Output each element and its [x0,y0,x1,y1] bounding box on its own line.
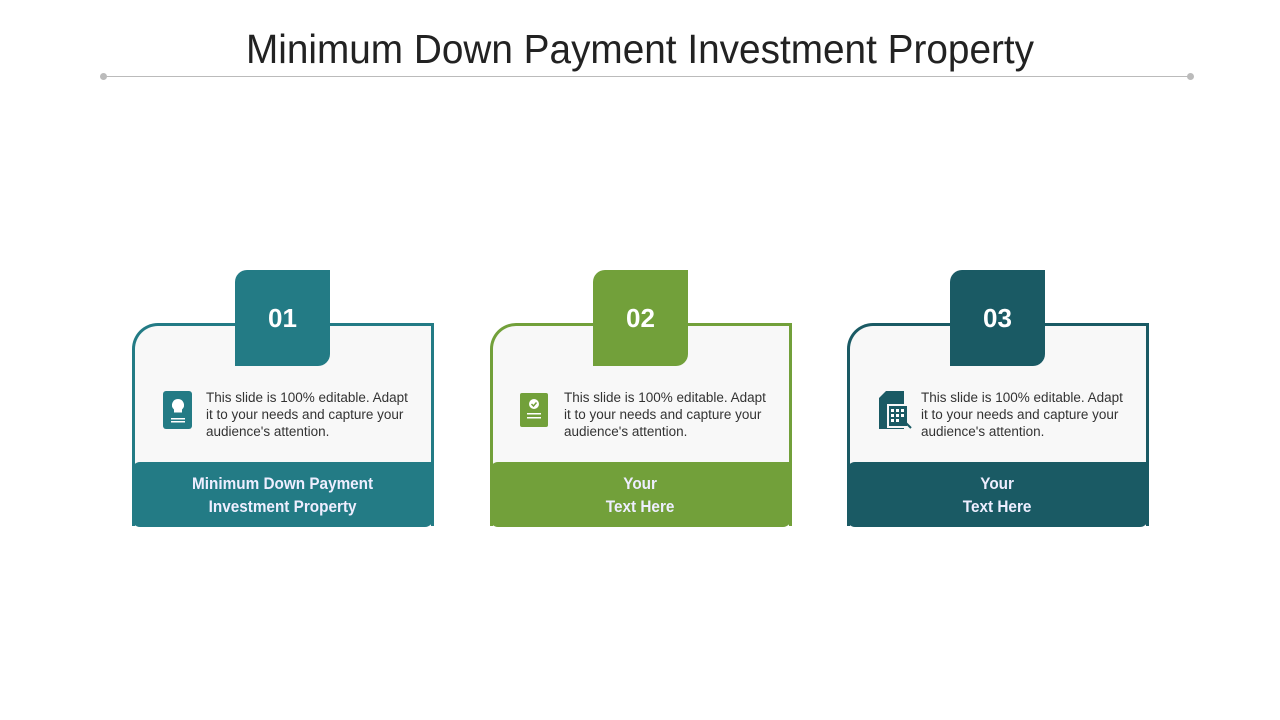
icon: calculator document [879,391,912,429]
text block: it to your needs and capture your audience's attention. [206,407,403,439]
number tab 02 [593,270,688,366]
label bar: Minimum Down Payment [192,474,373,492]
number tab 03: 03 [983,302,1012,332]
label bar: Your [981,474,1014,492]
title: Minimum Down Payment Investment Property [246,26,1034,72]
label bar [847,462,1148,527]
number tab 02: 02 [626,302,655,332]
text block: This slide is 100% editable. Adapt [206,390,408,405]
text block: This slide is 100% editable. Adapt [921,390,1123,405]
label bar [132,462,433,527]
text block [564,390,766,439]
label bar: Text Here [606,496,675,516]
panel: 01 [132,270,434,527]
text block: This slide is 100% editable. Adapt [564,390,766,405]
label bar: Your [624,474,657,492]
number tab 01: 01 [268,302,297,332]
text block: it to your needs and capture your audience's attention. [921,407,1118,439]
icon: lightbulb [163,391,192,429]
text block: it to your needs and capture your audience's attention. [564,407,761,439]
panel: 02 [490,270,792,527]
number tab 01 [235,270,330,366]
label bar: Text Here [963,496,1032,516]
label bar [490,462,791,527]
icon: document check [520,393,548,427]
panel: 03 [847,270,1149,527]
title rule [104,76,1190,77]
text block [921,390,1123,439]
label bar: Investment Property [209,496,356,516]
text block [206,390,408,439]
number tab 03 [950,270,1045,366]
